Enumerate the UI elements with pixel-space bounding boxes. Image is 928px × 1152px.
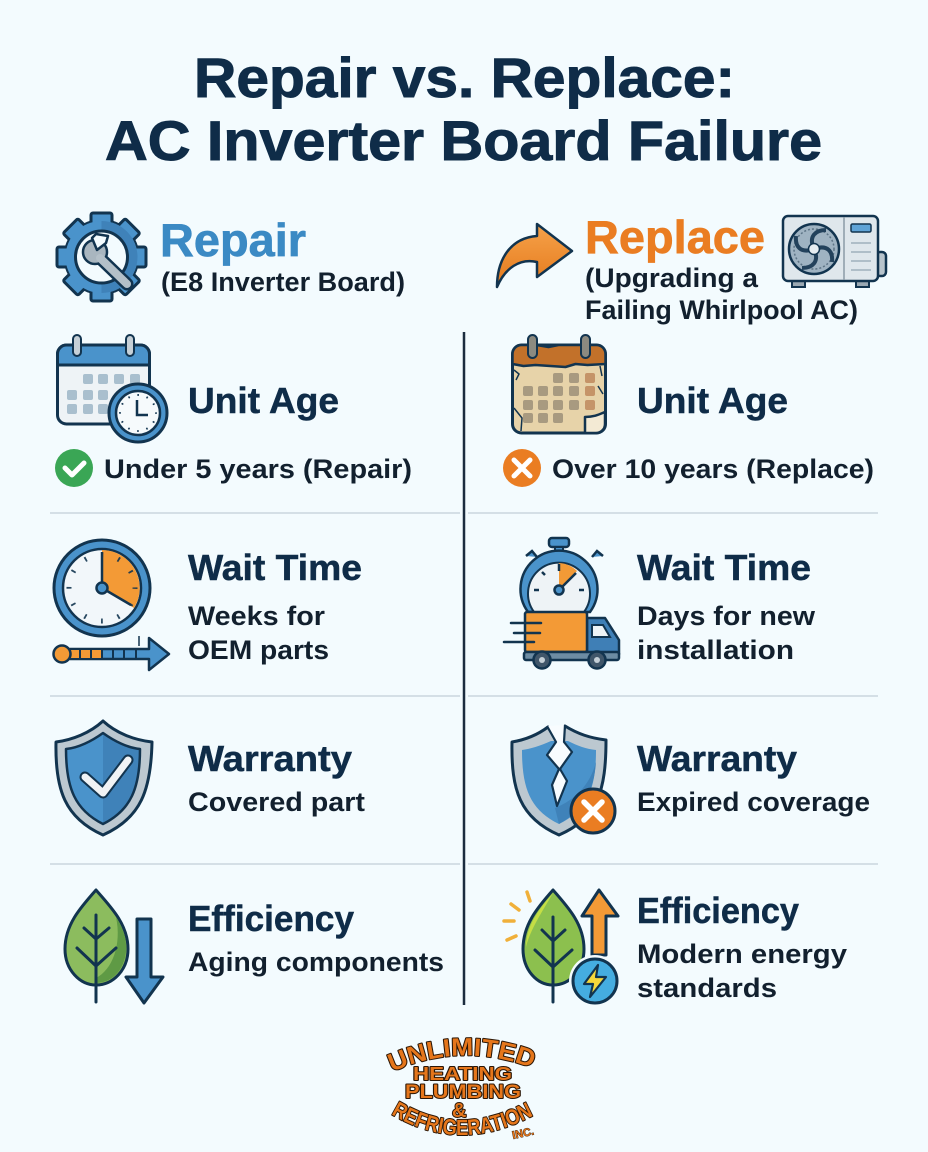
icon: gear with wrench (57, 213, 146, 301)
text: modern energy standards: Modern energy (637, 939, 847, 969)
text: days for new installation (637, 601, 816, 665)
text: modern energy standards: standards (637, 973, 777, 1003)
logo: UNLIMITED (386, 1037, 536, 1070)
icon: green check (55, 449, 93, 487)
text: weeks for oem parts (188, 601, 329, 665)
icon: worn calendar (512, 335, 606, 433)
icon: broken shield with x (512, 725, 615, 835)
subheading: replace (585, 263, 858, 325)
logo: & (452, 1100, 466, 1122)
text: weeks for oem parts: Weeks for (188, 601, 326, 631)
header: replace (497, 211, 886, 325)
logo: REFRIGERATION (391, 1100, 534, 1136)
logo: PLUMBING (405, 1082, 521, 1103)
row: efficiency replace (504, 890, 847, 1007)
icon: curved orange arrow (497, 224, 572, 287)
heading: efficiency: Efficiency (188, 898, 354, 939)
icon: outdoor ac unit (783, 216, 886, 287)
row: unit age repair (55, 335, 412, 487)
text: covered part: Covered part (188, 787, 365, 817)
row: wait time replace (504, 538, 816, 668)
title: Repair vs. Replace: (194, 46, 735, 109)
subheading: replace: (Upgrading a (585, 263, 759, 293)
logo (386, 1037, 536, 1142)
icon: calendar with clock (58, 335, 167, 442)
text: modern energy standards (637, 939, 847, 1003)
text: expired coverage: Expired coverage (637, 787, 870, 817)
heading: warranty: Warranty (188, 738, 352, 779)
row: warranty replace (512, 725, 870, 835)
panel: repair column (54, 213, 444, 1003)
logo: HEATING (413, 1064, 512, 1084)
icon: stopwatch and delivery truck (504, 538, 619, 668)
heading: unit age: Unit Age (188, 380, 339, 421)
heading: wait time: Wait Time (188, 547, 362, 588)
subheading: repair: (E8 Inverter Board) (161, 267, 405, 297)
text: weeks for oem parts: OEM parts (188, 635, 329, 665)
text: days for new installation: installation (637, 635, 794, 665)
subheading: replace: Failing Whirlpool AC) (585, 295, 858, 325)
heading: wait time: Wait Time (637, 547, 811, 588)
icon: shield with check (56, 721, 152, 835)
heading: replace: Replace (585, 211, 765, 263)
icon: leaf with down arrow (65, 890, 163, 1003)
row: wait time repair (54, 540, 362, 670)
heading: unit age: Unit Age (637, 380, 788, 421)
icon: leaf, up arrow and energy badge (504, 890, 621, 1007)
heading: repair: Repair (160, 214, 306, 266)
icon: orange x (503, 449, 541, 487)
icon: clock and progress arrow (54, 540, 169, 670)
title (105, 46, 822, 172)
panel: replace column (497, 211, 886, 1007)
title: AC Inverter Board Failure (105, 109, 822, 172)
row: warranty repair (56, 721, 365, 835)
heading: warranty: Warranty (637, 738, 797, 779)
logo: INC. (511, 1126, 535, 1142)
header: repair (57, 213, 405, 301)
row: efficiency repair (65, 890, 444, 1003)
row: unit age replace (503, 335, 874, 487)
text: over 10 years: Over 10 years (Replace) (552, 454, 874, 484)
text: days for new installation: Days for new (637, 601, 816, 631)
text: aging components: Aging components (188, 947, 444, 977)
text: under 5 years: Under 5 years (Repair) (104, 454, 412, 484)
heading: efficiency: Efficiency (637, 890, 799, 931)
